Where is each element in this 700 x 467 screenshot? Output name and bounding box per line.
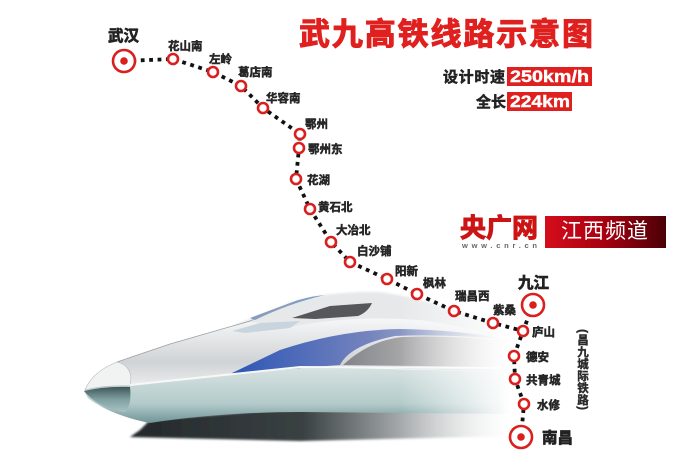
train roof blue accent [250, 295, 325, 320]
station: 左岭 [208, 52, 232, 77]
gray side panel [343, 337, 510, 367]
station: 华容南 [258, 91, 300, 113]
spec: total length: 全长 [476, 93, 506, 111]
title: 武九高铁线路示意图 [299, 17, 593, 52]
blue stripe [230, 329, 505, 374]
station: 枫林 [412, 276, 446, 299]
station: 大冶北: 大冶北 [336, 223, 371, 237]
spec: design speed [443, 67, 592, 86]
spec: design speed: 250km/h [510, 67, 589, 86]
station: 华容南: 华容南 [266, 91, 300, 105]
badge: Jiangxi channel [545, 216, 666, 248]
station: 水修: 水修 [537, 398, 560, 412]
station: 紫桑 [488, 303, 516, 328]
station: 阳新 [382, 264, 418, 284]
station: 九江: 九江 [518, 274, 550, 292]
station: 鄂州东: 鄂州东 [308, 142, 343, 156]
top outline [117, 304, 290, 362]
label: 昌九城际铁路 vertical: ) [576, 406, 588, 410]
station: 瑞昌西 [449, 289, 490, 316]
station: 德安 [509, 350, 549, 364]
white stripe [130, 367, 510, 385]
station: 紫桑: 紫桑 [493, 303, 516, 317]
station: 葛店南: 葛店南 [238, 65, 272, 79]
station: 黄石北 [305, 200, 353, 214]
label: 昌九城际铁路 vertical: ( [576, 329, 588, 333]
illustration: high-speed train [84, 285, 539, 445]
station: 花湖 [291, 173, 330, 187]
train lower body [84, 367, 520, 423]
station: 武汉: 武汉 [108, 27, 140, 45]
station: 庐山 [518, 325, 555, 339]
station: 左岭: 左岭 [209, 52, 232, 66]
badge: Jiangxi channel: 江西频道 [561, 220, 648, 243]
route line: Wuhan to Jiujiang [124, 59, 523, 331]
station: 花湖: 花湖 [307, 173, 330, 187]
label: 昌九城际铁路 vertical: 城 [577, 357, 589, 371]
nose lower [84, 387, 130, 412]
station: 共青城 [510, 373, 561, 387]
station: 阳新: 阳新 [395, 264, 418, 278]
station: 共青城: 共青城 [526, 373, 561, 387]
spec: total length [476, 92, 572, 111]
station: 瑞昌西: 瑞昌西 [455, 289, 490, 303]
station: 武汉 [108, 27, 140, 72]
station: 大冶北 [326, 223, 371, 247]
station: 白沙铺 [345, 244, 392, 267]
station: 枫林: 枫林 [423, 276, 446, 290]
station: 九江 [518, 274, 550, 316]
train body upper [84, 319, 520, 391]
label: 昌九城际铁路 vertical: 路 [577, 393, 589, 407]
cab window [292, 303, 372, 319]
spec: design speed: 设计时速 [443, 69, 505, 86]
station: 水修 [519, 398, 560, 412]
train undercarriage [130, 408, 515, 441]
station: 白沙铺: 白沙铺 [357, 244, 392, 258]
label: 昌九城际铁路 vertical: 九 [577, 346, 589, 359]
station: 南昌: 南昌 [542, 429, 573, 447]
side window glass [232, 321, 300, 333]
station: 鄂州: 鄂州 [305, 117, 328, 131]
right fade [400, 285, 510, 445]
nose cap [85, 362, 131, 390]
label: 昌九城际铁路 vertical: 际 [577, 369, 589, 383]
label: 昌九城际铁路 vertical [576, 329, 589, 410]
station: 南昌 [510, 426, 573, 448]
station: 庐山: 庐山 [532, 325, 555, 339]
spec: total length: 224km [510, 92, 570, 111]
train roof [232, 292, 520, 340]
label: 昌九城际铁路 vertical: 昌 [577, 334, 589, 347]
station: 花山南: 花山南 [168, 39, 202, 53]
station: 花山南 [168, 39, 202, 64]
label: 昌九城际铁路 vertical: 铁 [577, 381, 589, 395]
logo: CNR: 央广网 [460, 213, 538, 243]
logo: CNR: www.cnr.cn [461, 241, 537, 250]
route line: Jiujiang to Nanchang [514, 305, 533, 437]
station: 黄石北: 黄石北 [318, 200, 353, 214]
station: 葛店南 [236, 65, 272, 91]
station: 鄂州 [295, 117, 328, 139]
station: 鄂州东 [294, 142, 343, 156]
station: 德安: 德安 [526, 350, 549, 364]
